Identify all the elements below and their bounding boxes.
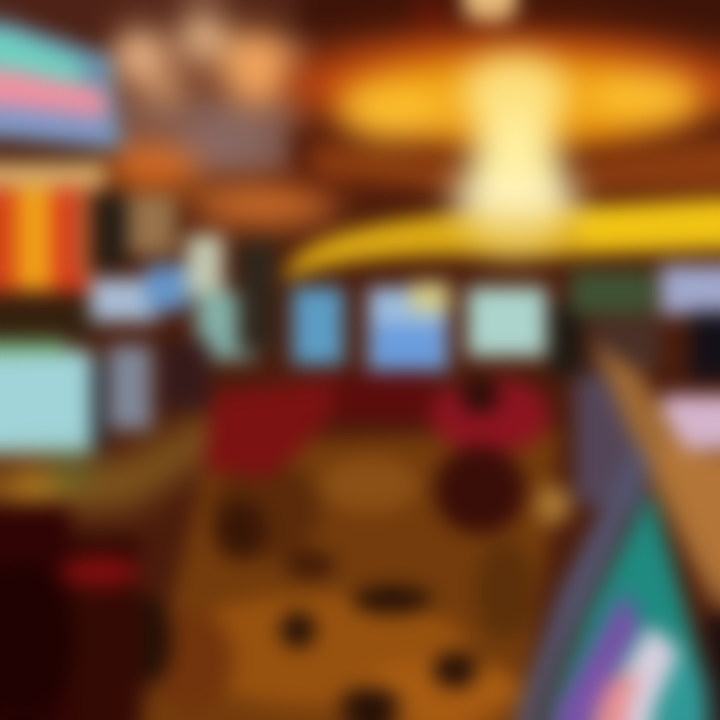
inner ceiling yellow ellipse <box>335 56 705 144</box>
ceiling lights top-left <box>116 11 294 108</box>
left counter strip <box>0 405 235 510</box>
mid-left column and panel <box>96 195 176 267</box>
right top screens <box>575 265 720 505</box>
ceiling top <box>300 0 720 30</box>
panel: centre blue screens <box>292 270 655 375</box>
ceiling ring <box>285 30 720 185</box>
panel: left lower screen <box>0 340 106 454</box>
panel: top-left screen <box>0 18 122 150</box>
mid wall soft <box>105 112 340 227</box>
carpet dark spots <box>128 500 477 720</box>
panel: left red and orange screen <box>0 162 105 338</box>
mid-left slot screens <box>90 235 276 430</box>
upper wall <box>0 0 320 170</box>
lamp spot <box>535 485 571 525</box>
right diagonal walkway <box>592 342 720 620</box>
bottom-left dark seating <box>0 505 140 720</box>
red seats <box>205 375 550 534</box>
right bottom carpet stripes <box>515 440 720 720</box>
yellow band <box>282 198 720 280</box>
chandelier <box>449 55 581 255</box>
lower ceiling dark band <box>310 140 720 192</box>
carpet <box>140 430 560 720</box>
